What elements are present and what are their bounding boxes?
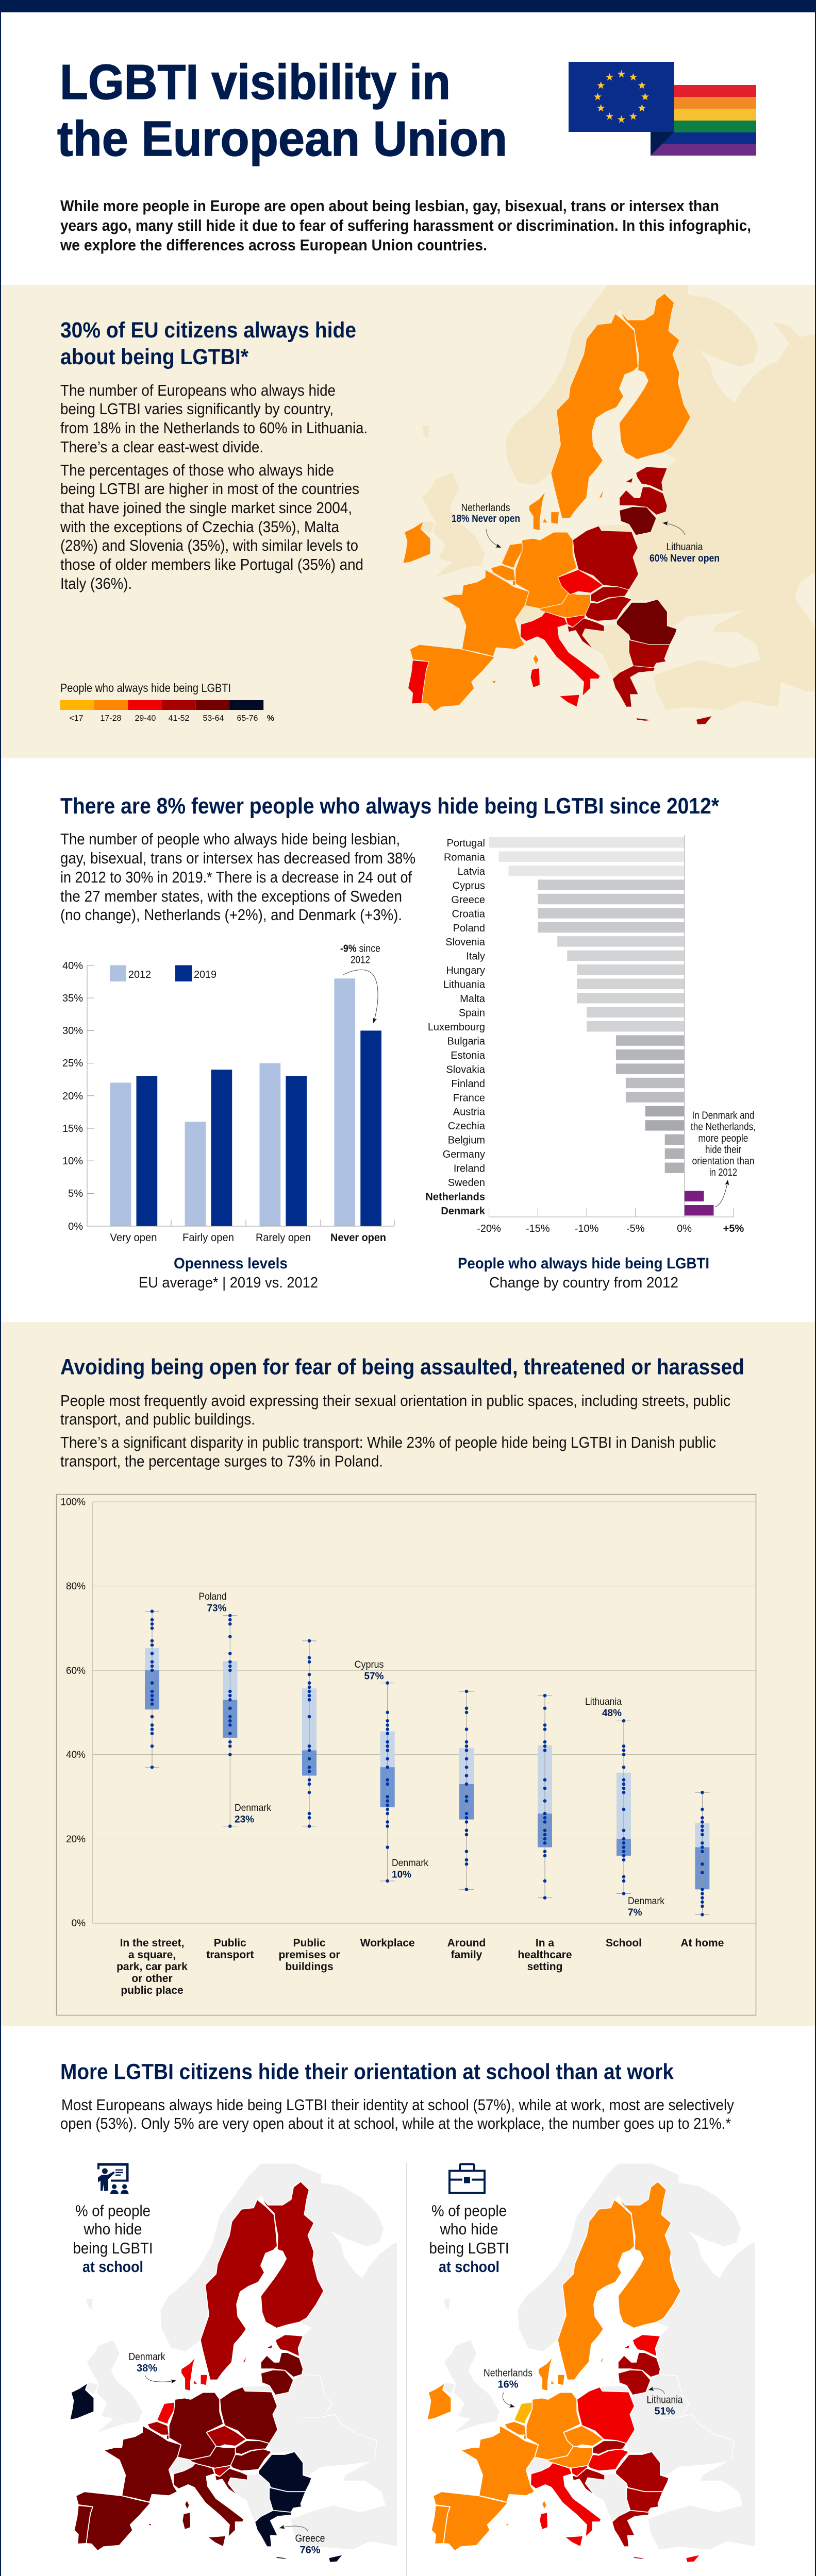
chart caption: Change by country from 2012 (489, 1275, 678, 1291)
horizontal bars (489, 837, 713, 1215)
intro text: While more people in Europe are open about being lesbian, gay, bisexual, trans or intersex than (60, 197, 719, 215)
chart caption: Openness levels (174, 1255, 288, 1272)
body text: (no change), Netherlands (+2%), and Denmark (+3%). (60, 906, 402, 924)
y axis labels (62, 960, 83, 1232)
legend: always hide: 53-64 (203, 714, 224, 723)
panel: school vs work (60, 2060, 792, 2576)
bars (110, 978, 381, 1226)
heading (60, 318, 356, 369)
category labels: In a (536, 1937, 554, 1949)
category labels: buildings (285, 1961, 334, 1973)
legend: years: 2012 (128, 969, 151, 980)
callout: Greece 76% (279, 2526, 325, 2556)
heading: about being LGTBI* (60, 345, 248, 369)
country labels: Luxembourg (428, 1022, 485, 1033)
body text: People most frequently avoid expressing their sexual orientation in public spaces, including streets, public (60, 1392, 730, 1410)
side border left (0, 12, 1, 2576)
label: hide at school: being LGBTI (73, 2239, 153, 2257)
chart: openness levels bars (62, 943, 394, 1291)
body text: (28%) and Slovenia (35%), with similar levels to (60, 536, 358, 554)
body text: open (53%). Only 5% are very open about it at school, while at the workplace, the number goes up to 21%.* (60, 2114, 731, 2132)
map: people who always hide (403, 273, 816, 725)
legend: always hide: 41-52 (169, 714, 190, 723)
callout: Lithuania 51% (646, 2389, 683, 2417)
callout: Netherlands 16% (484, 2368, 532, 2407)
body text: Most Europeans always hide being LGTBI their identity at school (57%), while at work, most are selectively (61, 2096, 734, 2114)
country labels: Slovenia (445, 937, 486, 948)
callout: Lithuania (650, 523, 720, 564)
body text: The number of Europeans who always hide (60, 381, 336, 399)
title (57, 55, 507, 166)
legend: always hide: <17 (69, 714, 84, 723)
body text: transport, and public buildings. (60, 1410, 255, 1428)
panel: header (0, 0, 816, 254)
non-EU land (86, 2164, 397, 2549)
y axis labels: 0% (68, 1221, 83, 1232)
country labels: Sweden (448, 1177, 485, 1189)
EU countries (427, 2181, 700, 2563)
body text: being LGTBI varies significantly by country, (60, 400, 334, 418)
callout: Denmark 38% (129, 2351, 176, 2382)
y axis labels (60, 1497, 86, 1929)
data labels: Poland (199, 1591, 227, 1602)
callout: Lithuania: Lithuania (666, 541, 703, 553)
category labels: a square, (128, 1949, 176, 1961)
callout: Netherlands (452, 502, 520, 548)
callout: Lithuania: 60% Never open (650, 553, 720, 564)
chart: change by country (425, 835, 756, 1291)
y axis labels: 60% (66, 1666, 86, 1676)
annotation: -9% since 2012: -9% since (340, 943, 380, 954)
panel: 30% always hide (0, 273, 816, 758)
country labels: Austria (453, 1107, 486, 1118)
country labels: Bulgaria (447, 1036, 486, 1047)
title: LGBTI visibility in (60, 55, 451, 110)
country labels: France (453, 1092, 485, 1104)
icon: classroom (97, 2163, 129, 2194)
country labels: Lithuania (443, 979, 486, 991)
body text (60, 830, 415, 924)
data labels: 48% (602, 1708, 622, 1719)
category labels: Very open (110, 1232, 157, 1244)
data labels: 73% (207, 1603, 227, 1614)
frame (57, 1494, 756, 2015)
callout: Greece 76%: Greece (295, 2533, 325, 2544)
category labels: park, car park (116, 1961, 188, 1973)
data labels: 10% (392, 1869, 411, 1880)
country labels: Netherlands (425, 1191, 485, 1202)
legend: always hide: % (267, 714, 274, 723)
body text (60, 1392, 730, 1470)
country labels: Portugal (446, 838, 485, 849)
legend: always hide: 65-76 (237, 714, 258, 723)
icon: briefcase (449, 2164, 485, 2193)
heading: More LGTBI citizens hide their orientation at school than at work (60, 2060, 674, 2084)
category labels: At home (680, 1937, 724, 1949)
x axis labels: -5% (626, 1223, 645, 1234)
country labels (425, 838, 486, 1217)
label: hide at school (73, 2202, 153, 2276)
y axis labels: 25% (62, 1058, 83, 1069)
intro text: we explore the differences across European Union countries. (60, 236, 487, 254)
icon: EU and rainbow flags (569, 62, 756, 156)
country labels: Cyprus (453, 880, 485, 891)
country labels: Estonia (451, 1050, 486, 1061)
grid (93, 1502, 756, 1923)
category labels: Public (214, 1937, 246, 1949)
callout: Lithuania 51%: Lithuania (646, 2395, 683, 2406)
body text: There’s a clear east-west divide. (60, 438, 263, 456)
side border right (815, 12, 816, 2576)
annotation: -9% since 2012: 2012 (351, 954, 370, 965)
category labels: Around (447, 1937, 486, 1949)
data labels: Cyprus (355, 1659, 384, 1670)
x axis labels: -15% (526, 1223, 550, 1234)
cream background (0, 285, 816, 758)
data labels (199, 1591, 664, 1918)
box plot: street (145, 1612, 159, 1767)
data labels: Denmark (392, 1858, 428, 1869)
top navy bar (0, 0, 816, 12)
map: hide at school (70, 2164, 397, 2562)
category labels: setting (527, 1961, 562, 1973)
cream background (0, 1322, 816, 2026)
callout: Denmark 38%: 38% (137, 2363, 157, 2374)
label: hide at school: at school (82, 2258, 143, 2276)
non-EU land (443, 2164, 755, 2549)
country labels: Finland (451, 1078, 485, 1090)
callout: Netherlands: Netherlands (461, 502, 510, 514)
y axis labels: 35% (62, 993, 83, 1004)
country labels: Romania (444, 852, 486, 863)
label: hide at school: who hide (84, 2220, 142, 2238)
body text: gay, bisexual, trans or intersex has decreased from 38% (60, 849, 415, 867)
country labels: Belgium (448, 1135, 485, 1146)
country labels: Malta (460, 993, 486, 1005)
chart caption: EU average* | 2019 vs. 2012 (139, 1275, 318, 1291)
non-EU land (414, 273, 816, 710)
annotation: more people hide: hide their (705, 1144, 741, 1156)
data labels: Denmark (628, 1896, 664, 1907)
country labels: Italy (466, 951, 485, 962)
x axis labels (477, 1223, 744, 1234)
callout: Lithuania 51%: 51% (654, 2406, 675, 2417)
category labels: Workplace (360, 1937, 415, 1949)
y axis labels: 40% (62, 960, 83, 972)
country labels: Latvia (458, 866, 486, 877)
x axis labels: +5% (723, 1223, 744, 1234)
box plot: public premises (302, 1641, 317, 1826)
x axis labels: 0% (677, 1223, 692, 1234)
label: hide at work: at school (439, 2258, 499, 2276)
label: hide at work (429, 2202, 509, 2276)
y axis labels: 20% (66, 1834, 86, 1845)
callout: Denmark 38%: Denmark (129, 2351, 165, 2363)
callout: Netherlands 16%: 16% (497, 2379, 519, 2391)
legend: years: 2019 (194, 969, 217, 980)
y axis labels: 10% (62, 1156, 83, 1167)
legend: always hide (60, 681, 274, 723)
map: hide at work (428, 2164, 755, 2562)
y axis labels: 30% (62, 1025, 83, 1037)
y axis labels: 5% (68, 1188, 83, 1199)
body text: being LGTBI are higher in most of the countries (60, 480, 359, 498)
body text: The number of people who always hide being lesbian, (60, 830, 400, 848)
label: hide at work: % of people (431, 2202, 507, 2219)
body text: the 27 member states, with the exceptions of Sweden (60, 887, 402, 905)
country labels: Greece (451, 894, 485, 906)
annotation: more people hide (691, 1110, 756, 1207)
body text: in 2012 to 30% in 2019.* There is a decrease in 24 out of (60, 868, 412, 886)
body text (60, 2096, 734, 2132)
label: hide at school: % of people (75, 2202, 151, 2219)
label: hide at work: being LGBTI (429, 2239, 509, 2257)
category labels: In the street, (120, 1937, 184, 1949)
y axis labels: 0% (72, 1918, 86, 1929)
category labels: family (451, 1949, 482, 1961)
category labels: School (606, 1937, 642, 1949)
body text: transport, the percentage surges to 73% in Poland. (60, 1452, 383, 1470)
annotation: more people hide: In Denmark and (692, 1110, 755, 1122)
body text: from 18% in the Netherlands to 60% in Lithuania. (60, 419, 368, 437)
box plot: healthcare (538, 1696, 552, 1898)
chart caption: People who always hide being LGBTI (458, 1255, 709, 1272)
legend: always hide: People who always hide being LGBTI (60, 681, 231, 694)
callout: Greece 76%: 76% (299, 2545, 321, 2556)
category labels (110, 1232, 386, 1244)
country labels: Germany (443, 1149, 485, 1160)
category labels: premises or (278, 1949, 340, 1961)
body text: that have joined the single market since 2004, (60, 499, 352, 517)
y axis labels: 80% (66, 1581, 86, 1592)
country labels: Poland (453, 923, 485, 934)
data labels: 23% (235, 1815, 254, 1825)
EU countries (403, 293, 712, 725)
heading: Avoiding being open for fear of being assaulted, threatened or harassed (60, 1355, 744, 1380)
body text: There’s a significant disparity in public transport: While 23% of people hide being LGTBI in Danish public (60, 1433, 716, 1451)
callout: Netherlands 16%: Netherlands (484, 2368, 532, 2379)
x axis labels: -20% (477, 1223, 501, 1234)
panel: 8% fewer since 2012 (60, 793, 756, 1291)
annotation: more people hide: more people (698, 1133, 748, 1144)
x axis labels: -10% (575, 1223, 599, 1234)
country labels: Hungary (446, 965, 485, 976)
body text: The percentages of those who always hide (60, 461, 334, 479)
intro text (60, 197, 751, 254)
country labels: Denmark (441, 1206, 486, 1217)
legend: years (110, 965, 217, 981)
chart: box plots by setting (57, 1494, 756, 2015)
annotation: -9% since 2012 (340, 943, 380, 1023)
country labels: Slovakia (446, 1064, 486, 1075)
category labels: healthcare (518, 1949, 572, 1961)
category labels: Rarely open (256, 1232, 311, 1244)
y axis labels: 15% (62, 1123, 83, 1134)
data labels: Lithuania (585, 1697, 622, 1707)
box plot: public transport (223, 1616, 237, 1826)
callout: Netherlands: 18% Never open (452, 513, 520, 524)
divider (406, 2162, 407, 2576)
y axis labels: 100% (60, 1497, 86, 1507)
intro text: years ago, many still hide it due to fear of suffering harassment or discrimination. In this infographic, (60, 216, 751, 234)
chart caption (458, 1255, 709, 1291)
EU countries (70, 2181, 343, 2563)
country labels: Croatia (452, 908, 486, 920)
heading: There are 8% fewer people who always hide being LGTBI since 2012* (60, 793, 720, 819)
body text (60, 381, 368, 592)
chart caption (139, 1255, 318, 1291)
category labels: Never open (330, 1232, 386, 1244)
label: hide at work: who hide (440, 2220, 498, 2238)
data labels: Denmark (235, 1803, 271, 1814)
body text: with the exceptions of Czechia (35%), Malta (60, 518, 340, 536)
panel: avoiding being open (0, 1322, 816, 2026)
box plot: around family (459, 1691, 474, 1889)
y axis (87, 965, 394, 1226)
legend: always hide: 29-40 (135, 714, 156, 723)
annotation: more people hide: orientation than (692, 1156, 755, 1167)
data labels: 7% (628, 1907, 642, 1918)
body text: those of older members like Portugal (35%) and (60, 555, 363, 573)
box plot: workplace (380, 1683, 395, 1881)
box plot: home (695, 1792, 709, 1914)
country labels: Czechia (448, 1121, 486, 1132)
annotation: more people hide: the Netherlands, (691, 1122, 756, 1133)
box plot: school (617, 1721, 631, 1893)
category labels: or other (131, 1973, 173, 1985)
y axis labels: 20% (62, 1091, 83, 1102)
category labels: public place (121, 1985, 184, 1996)
category labels (116, 1937, 724, 1996)
category labels: transport (206, 1949, 254, 1961)
data labels: 57% (364, 1671, 384, 1682)
body text: Italy (36%). (60, 574, 132, 592)
annotation: more people hide: in 2012 (709, 1167, 737, 1178)
title: the European Union (57, 111, 507, 166)
country labels: Ireland (454, 1163, 485, 1175)
legend: always hide: 17-28 (101, 714, 122, 723)
axes (489, 835, 734, 1217)
y axis labels: 40% (66, 1750, 86, 1760)
country labels: Spain (459, 1008, 485, 1019)
category labels: Fairly open (182, 1232, 234, 1244)
heading: 30% of EU citizens always hide (60, 318, 356, 343)
category labels: Public (293, 1937, 326, 1949)
